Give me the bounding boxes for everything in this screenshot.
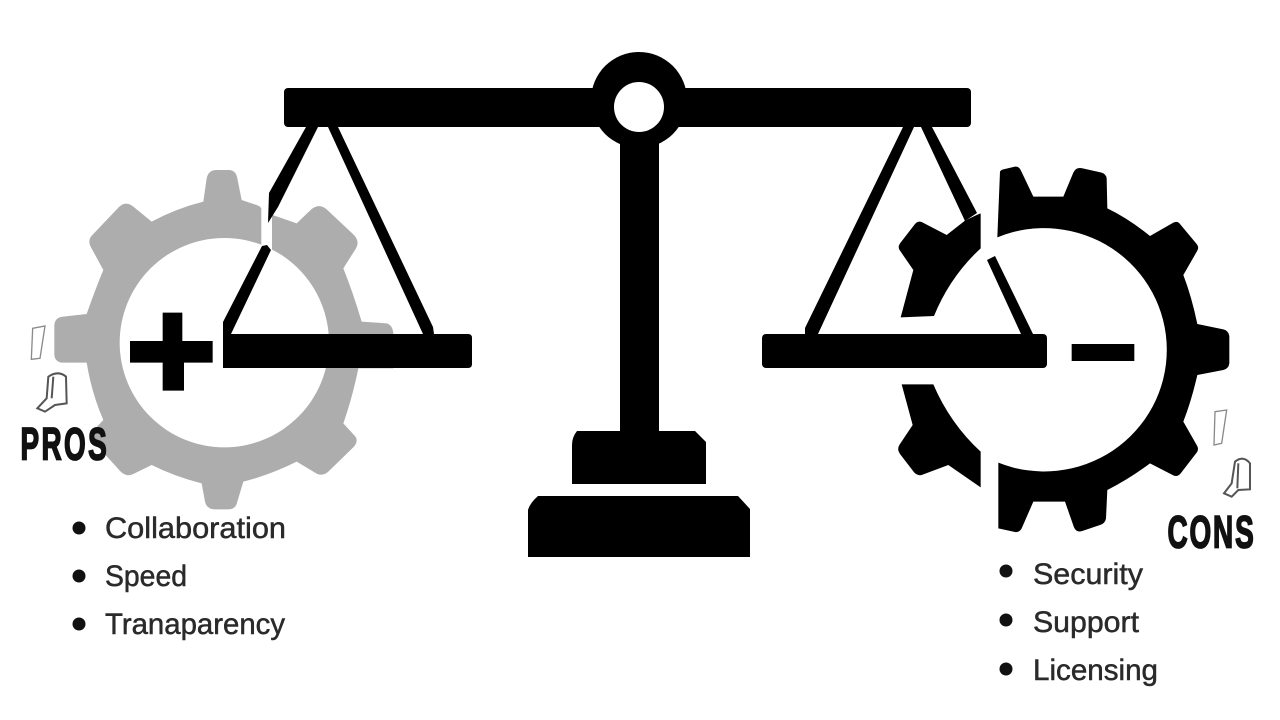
icon: plus sign — [130, 313, 213, 391]
right pan hangers — [805, 127, 1033, 334]
item: support: Support — [1033, 606, 1140, 639]
pros heading: PROS — [20, 419, 107, 469]
item: licensing: Licensing — [1033, 654, 1158, 687]
icon: grey pros gear — [54, 170, 393, 509]
cons outline marks — [1214, 410, 1250, 497]
pros outline marks — [31, 326, 67, 412]
left pan — [223, 334, 472, 368]
item: speed: Speed — [105, 560, 187, 593]
item: transparency: Tranaparency — [105, 608, 285, 641]
upper base block — [572, 431, 706, 484]
scale pivot ring — [591, 52, 687, 148]
cons heading: CONS — [1168, 507, 1254, 557]
scale beam — [284, 88, 971, 127]
left pan hangers — [223, 127, 434, 334]
item: collaboration: Collaboration — [105, 512, 286, 545]
balance scale — [223, 52, 1047, 557]
item: security: Security — [1033, 558, 1143, 591]
right pan — [762, 334, 1047, 368]
icon: minus sign — [1072, 344, 1134, 361]
scale post — [620, 140, 659, 437]
icon: black cons gear — [898, 167, 1229, 532]
lower left gear fragment — [898, 384, 981, 487]
upper left gear fragment — [899, 213, 981, 317]
lower base block — [528, 496, 750, 557]
pros list — [72, 512, 286, 641]
cons list — [1000, 558, 1158, 687]
item: speed — [72, 560, 187, 593]
